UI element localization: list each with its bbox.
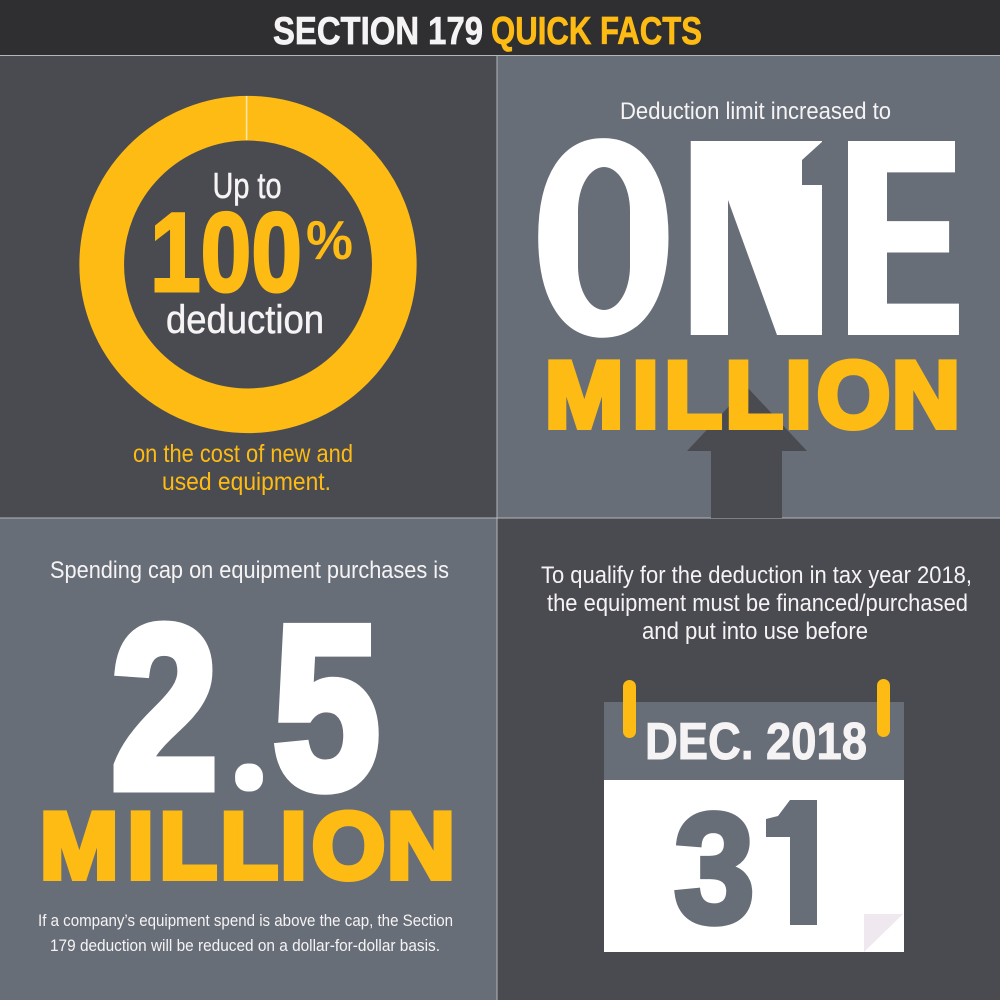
stat: 2.5 xyxy=(111,579,380,838)
text: deduction: deduction xyxy=(166,298,324,342)
text: on the cost of new and used equipment: on the cost of new and xyxy=(133,440,353,468)
letter O: O xyxy=(530,79,676,395)
stat: 100%: 100 xyxy=(150,190,302,315)
stat: 2.5: 5 xyxy=(273,579,380,838)
text: cap note: If a company’s equipment spend is above the cap, the Section xyxy=(38,911,453,930)
text: qualification xyxy=(541,562,972,645)
text: on the cost of new and used equipment: used equipment. xyxy=(162,468,331,496)
calendar day: 3 xyxy=(674,781,755,955)
panel: one million xyxy=(497,56,1000,518)
calendar page fold xyxy=(864,914,903,952)
calendar day xyxy=(674,781,847,955)
calendar month: DEC. 2018 xyxy=(645,713,867,771)
stat: 2.5: 2 xyxy=(111,579,218,838)
panel: deadline xyxy=(497,518,1000,1000)
stat: million: MILLION xyxy=(40,793,455,898)
letter N with numeral 1: N xyxy=(678,79,815,395)
panel: 100% deduction xyxy=(0,56,497,518)
text: qualification: and put into use before xyxy=(642,618,868,645)
stat: million: MILLION xyxy=(545,342,960,447)
calendar pin left xyxy=(623,680,636,738)
panel: header bar xyxy=(0,0,1000,55)
icon: calendar xyxy=(604,679,904,955)
calendar pin right xyxy=(877,679,890,737)
text: on the cost of new and used equipment xyxy=(133,440,353,496)
title: SECTION 179 xyxy=(273,10,483,53)
stat: 2.5: . xyxy=(246,762,252,784)
text: up to: Up to xyxy=(212,165,282,206)
stat: one xyxy=(530,79,967,395)
text: spending cap: Spending cap on equipment purchases is xyxy=(50,557,449,584)
text: deduction limit: Deduction limit increased to xyxy=(620,98,891,125)
letter E: E xyxy=(835,80,967,395)
title xyxy=(273,10,702,53)
text: cap note xyxy=(38,911,453,955)
panel: 2.5 million xyxy=(0,518,497,1000)
text: cap note: 179 deduction will be reduced on a dollar-for-dollar basis. xyxy=(50,936,440,955)
stat: 100%: % xyxy=(306,209,353,271)
text: qualification: the equipment must be financed/purchased xyxy=(547,590,968,617)
arrow: up xyxy=(687,387,807,518)
title: QUICK FACTS xyxy=(491,10,702,53)
donut chart: 100% xyxy=(102,96,394,411)
calendar day: 1 xyxy=(760,781,840,955)
text: qualification: To qualify for the deduction in tax year 2018, xyxy=(541,562,972,589)
